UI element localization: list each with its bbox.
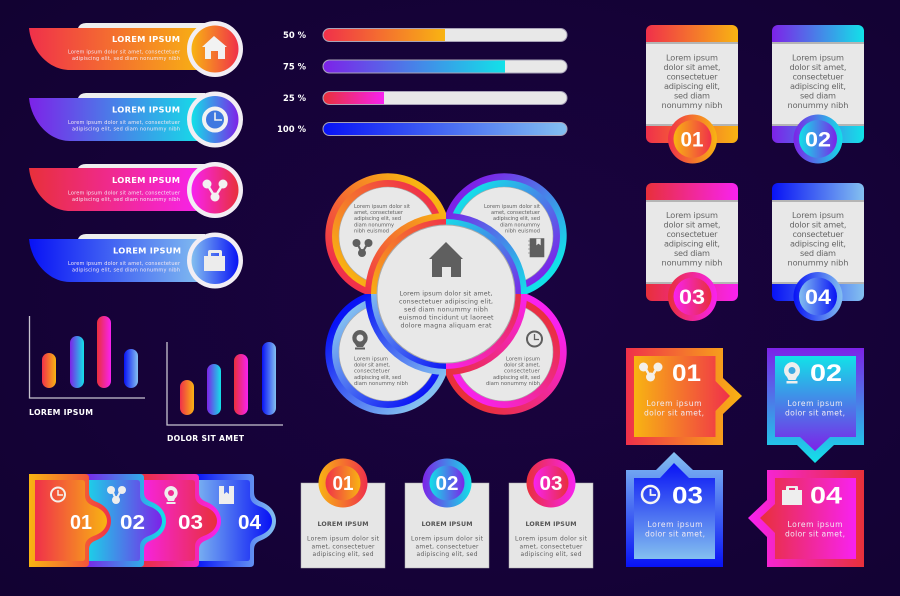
panel: progress bars: [277, 28, 567, 136]
bottom card 03: amet, consectetuer: [520, 544, 583, 550]
card 04: adipiscing elit,: [790, 238, 846, 248]
petal text top left: Lorem ipsum dolor sit: [354, 204, 410, 210]
card 04: 04: [805, 286, 831, 309]
puzzle piece 02: [80, 474, 166, 567]
petal top left: [325, 173, 446, 294]
card 03: Lorem ipsum: [666, 210, 718, 220]
callout 02: 02: [810, 360, 842, 387]
panel: bar chart 1: LOREM IPSUM: [29, 408, 93, 417]
banner 1: LOREM IPSUM: [112, 34, 180, 44]
callout 01: [626, 348, 742, 445]
bottom card 01: 01: [332, 473, 354, 495]
banner 3: adipiscing elit, sed diam nonummy nibh: [72, 197, 180, 203]
petal text bottom left: diam nonummy nibh: [354, 381, 408, 387]
petal text top right: diam nonummy: [500, 222, 540, 228]
panel: bar chart 2: DOLOR SIT AMET: [167, 434, 245, 443]
panel: bar chart 2: [167, 342, 283, 443]
bottom card 02: amet, consectetuer: [416, 544, 479, 550]
progress 100 %: [277, 122, 567, 136]
center text: [398, 290, 494, 330]
card 03: nonummy nibh: [662, 258, 722, 268]
bottom card 02: [405, 458, 489, 568]
banner 3: LOREM IPSUM: [112, 175, 180, 185]
puzzle piece 03: [135, 474, 221, 567]
bottom card 03: Lorem ipsum dolor sit: [515, 536, 588, 542]
progress 75 %: 75 %: [283, 62, 307, 72]
banner 4: [29, 232, 243, 288]
center text: consectetuer adipiscing elit,: [399, 298, 493, 306]
petal text bottom right: Lorem ipsum: [506, 356, 540, 362]
card 02: Lorem ipsum: [792, 52, 844, 62]
bottom card 03: LOREM IPSUM: [526, 521, 576, 528]
petal text bottom right: adipiscing elit, sed: [493, 375, 540, 381]
progress 100 %: 100 %: [277, 124, 307, 134]
card 03: dolor sit amet,: [664, 220, 720, 230]
panel: puzzle strip: [29, 474, 276, 567]
puzzle icon: clock: [51, 488, 65, 502]
callout 02: Lorem ipsum: [788, 399, 842, 408]
petal text bottom right: consectetuer: [504, 369, 541, 375]
puzzle labels: [70, 512, 262, 534]
panel: numbered cards: [646, 25, 864, 321]
panel: circular diagram: [325, 173, 567, 415]
card 03: [646, 183, 738, 321]
bottom card 02: adipiscing elit, sed: [416, 551, 478, 558]
panel: bar chart 1: [29, 316, 145, 417]
petal text bottom right: dolor sit amet,: [504, 362, 540, 368]
card 01: consectetuer: [666, 72, 718, 82]
icon: clock: [527, 332, 542, 346]
puzzle icon: bulb: [164, 486, 178, 504]
banner 1: [29, 21, 243, 77]
card 02: consectetuer: [792, 72, 844, 82]
card 02: dolor sit amet,: [790, 62, 846, 72]
puzzle labels: 04: [238, 512, 262, 534]
callout 02: [767, 348, 864, 463]
card 03: consectetuer: [666, 229, 718, 239]
bottom card 01: adipiscing elit, sed: [312, 551, 374, 558]
banner 1: Lorem ipsum dolor sit amet, consectetuer: [68, 50, 181, 56]
banner 4: adipiscing elit, sed diam nonummy nibh: [72, 268, 180, 274]
panel: banner list: [29, 21, 243, 288]
puzzle piece 04: [190, 474, 276, 567]
petal text top right: amet, consectetuer: [491, 210, 541, 216]
center text: euismod tincidunt ut laoreet: [398, 314, 494, 322]
progress 75 %: [283, 60, 567, 73]
petal text top right: nibh euismod: [505, 228, 540, 234]
petal text top left: [354, 204, 410, 234]
banner 4: Lorem ipsum dolor sit amet, consectetuer: [68, 261, 181, 267]
callout 01: 01: [672, 360, 701, 387]
card 02: 02: [805, 128, 831, 152]
center text: sed diam nonummy nibh: [404, 306, 488, 314]
icon: book: [528, 238, 544, 257]
petal text top left: adipiscing elit, sed: [354, 216, 401, 222]
panel: bottom cards: [301, 458, 593, 568]
puzzle labels: 01: [70, 512, 92, 534]
callout 04: [748, 470, 864, 567]
card 01: dolor sit amet,: [664, 62, 720, 72]
banner 1: adipiscing elit, sed diam nonummy nibh: [72, 56, 180, 62]
card 04: Lorem ipsum: [792, 210, 844, 220]
petal text top right: adipiscing elit, sed: [493, 216, 540, 222]
petal text bottom left: consectetuer: [354, 369, 391, 375]
bottom card 02: 02: [436, 473, 458, 495]
card 02: [772, 25, 864, 164]
banner 3: Lorem ipsum dolor sit amet, consectetuer: [68, 190, 181, 196]
progress 25 %: 25 %: [283, 93, 307, 103]
bottom card 03: 03: [540, 473, 562, 495]
callout 04: Lorem ipsum: [788, 520, 842, 529]
petal text bottom left: [354, 356, 408, 387]
petal bottom right: [446, 294, 567, 415]
center text: Lorem ipsum dolor sit amet,: [400, 290, 492, 298]
puzzle icon: book: [219, 486, 234, 504]
petal text top left: diam nonummy: [354, 222, 394, 228]
card 04: consectetuer: [792, 229, 844, 239]
banner 2: LOREM IPSUM: [112, 104, 180, 114]
card 03: sed diam: [674, 248, 710, 258]
card 04: [772, 183, 864, 321]
card 04: dolor sit amet,: [790, 220, 846, 230]
petal text bottom right: diam nonummy nibh: [486, 381, 540, 387]
puzzle labels: 02: [120, 512, 145, 534]
petal text bottom right: [486, 356, 541, 387]
petal bottom left: [325, 294, 446, 415]
card 03: 03: [679, 286, 705, 309]
callout 03: [626, 452, 723, 567]
bottom card 02: Lorem ipsum dolor sit: [411, 536, 484, 542]
banner 4: LOREM IPSUM: [113, 246, 181, 256]
card 01: sed diam: [674, 91, 710, 101]
card 01: Lorem ipsum: [666, 52, 718, 62]
callout 01: dolor sit amet,: [644, 408, 704, 418]
petal text top right: [484, 204, 541, 234]
icon: house: [429, 242, 463, 277]
bottom card 01: LOREM IPSUM: [318, 521, 368, 528]
banner 2: adipiscing elit, sed diam nonummy nibh: [72, 126, 180, 132]
banner 2: Lorem ipsum dolor sit amet, consectetuer: [68, 120, 181, 126]
icon: share: [352, 239, 372, 257]
progress 50 %: [283, 28, 567, 42]
panel: callout squares: [626, 348, 864, 567]
card 01: nonummy nibh: [662, 100, 722, 110]
callout 03: dolor sit amet,: [645, 530, 705, 538]
callout 04: 04: [810, 482, 843, 510]
bottom card 03: adipiscing elit, sed: [520, 551, 582, 558]
progress 25 %: [283, 92, 567, 104]
bottom card 03: [509, 458, 593, 568]
card 04: nonummy nibh: [788, 258, 848, 268]
center text: dolore magna aliquam erat: [400, 322, 492, 330]
icon: bulb: [352, 330, 368, 350]
puzzle icon: share: [107, 486, 126, 504]
card 02: adipiscing elit,: [790, 81, 846, 91]
card 04: sed diam: [800, 248, 836, 258]
callout 02: dolor sit amet,: [785, 408, 845, 418]
callout 01: Lorem ipsum: [646, 399, 702, 408]
bottom card 01: [301, 458, 385, 568]
callout 03: 03: [672, 482, 703, 510]
progress 50 %: 50 %: [283, 30, 307, 40]
bottom card 02: LOREM IPSUM: [422, 521, 472, 528]
puzzle piece 01: [29, 474, 111, 567]
petal text top left: amet, consectetuer: [354, 210, 404, 216]
card 03: adipiscing elit,: [664, 238, 720, 248]
card 01: [646, 25, 738, 164]
card 01: 01: [680, 128, 704, 152]
card 02: sed diam: [800, 91, 836, 101]
petal text bottom left: dolor sit amet,: [354, 362, 390, 368]
petal top right: [446, 173, 567, 294]
center circle: [365, 213, 527, 375]
callout 04: dolor sit amet,: [785, 530, 845, 538]
bottom card 01: amet, consectetuer: [312, 544, 375, 550]
puzzle labels: 03: [178, 512, 203, 534]
petal text bottom left: adipiscing elit, sed: [354, 375, 401, 381]
card 02: nonummy nibh: [788, 100, 848, 110]
callout 03: Lorem ipsum: [648, 520, 702, 529]
banner 3: [29, 162, 243, 218]
petal text bottom left: Lorem ipsum: [354, 356, 388, 362]
bottom card 01: Lorem ipsum dolor sit: [307, 536, 380, 542]
petal text top left: nibh euismod: [354, 228, 389, 234]
card 01: adipiscing elit,: [664, 81, 720, 91]
banner 2: [29, 92, 243, 148]
petal text top right: Lorem ipsum dolor sit: [484, 204, 540, 210]
